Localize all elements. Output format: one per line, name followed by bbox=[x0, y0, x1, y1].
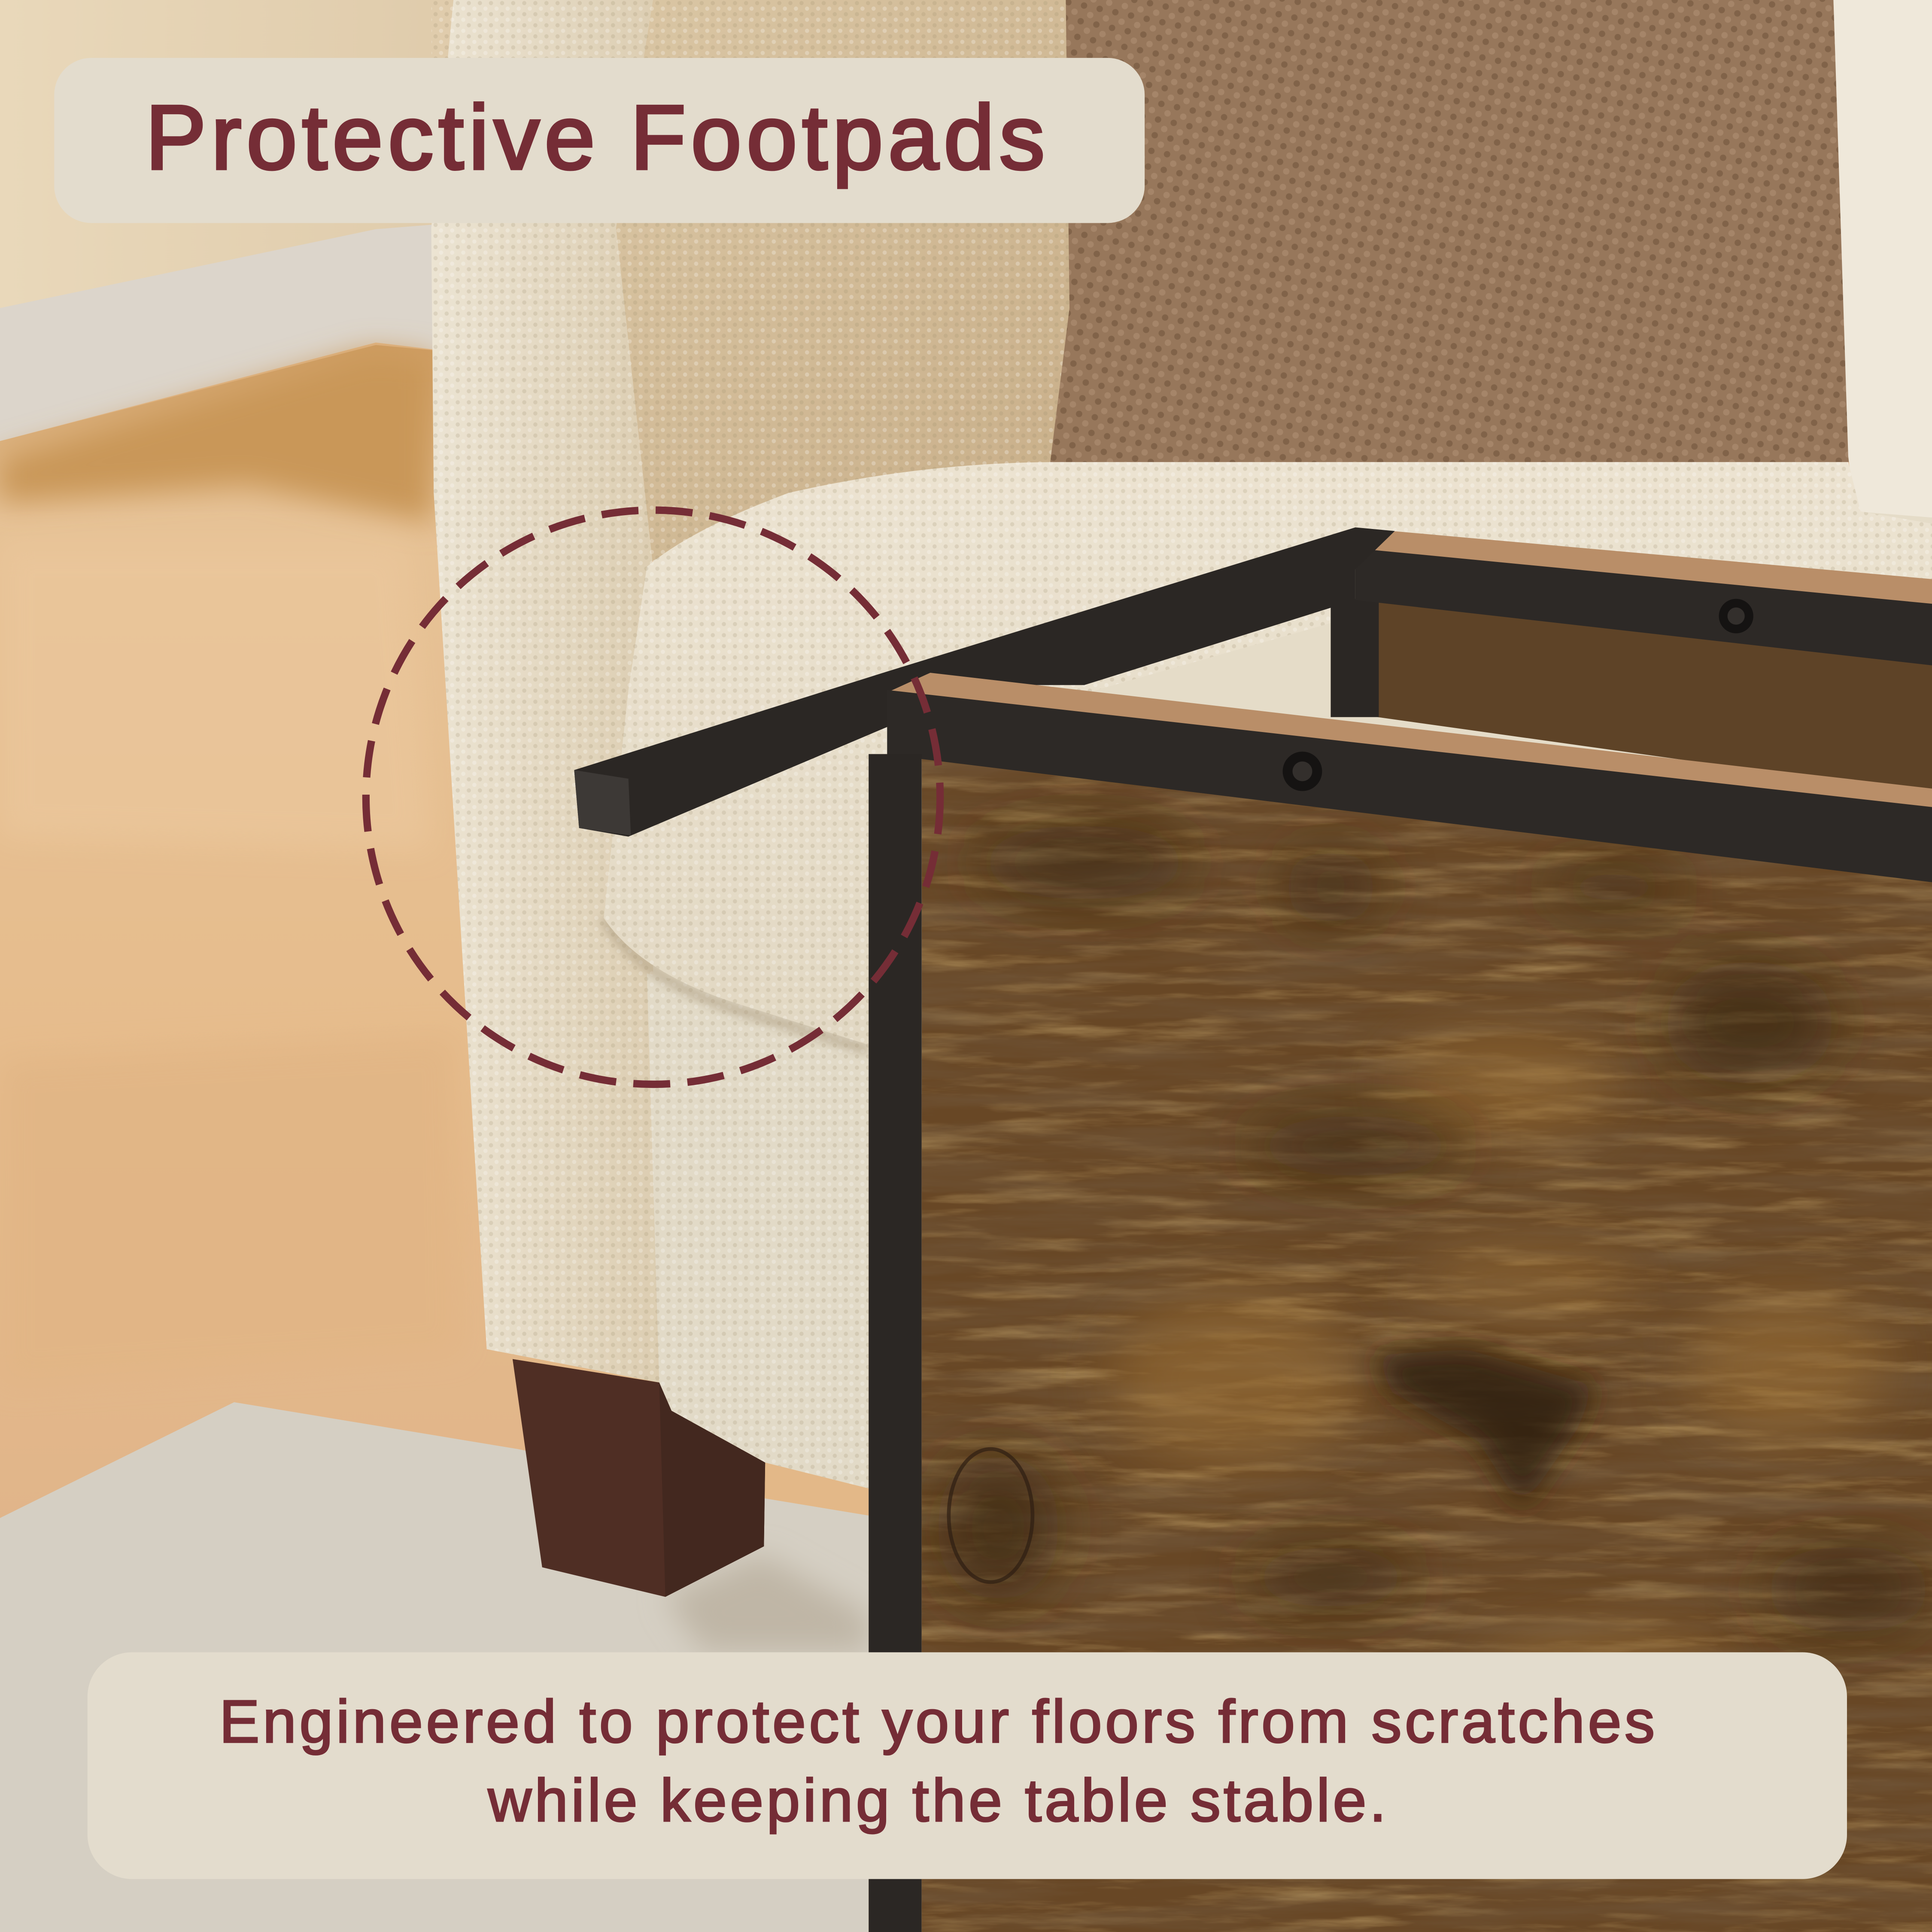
rail screw back bbox=[1719, 599, 1753, 633]
wood knot bbox=[949, 1449, 1033, 1582]
front frame rail bbox=[887, 690, 1932, 882]
title: Protective Footpads bbox=[146, 87, 1045, 188]
front wood top strip bbox=[887, 673, 1932, 811]
front frame leg bbox=[869, 754, 922, 1932]
rail screw front bbox=[1283, 752, 1322, 791]
seat weave bbox=[604, 462, 1932, 1045]
lower seat weave bbox=[647, 973, 869, 1488]
cushion shadow bbox=[604, 918, 869, 1050]
side rail bar bbox=[574, 527, 1395, 837]
back frame rail bbox=[1355, 548, 1932, 665]
back wood panel bbox=[1378, 592, 1932, 795]
lower seat front bbox=[647, 973, 869, 1488]
sofa body base bbox=[653, 493, 1932, 1109]
brown pillow bbox=[1050, 0, 1854, 466]
caption panel bbox=[88, 1653, 1847, 1879]
side table bbox=[574, 527, 1932, 1932]
rug shadow under leg bbox=[665, 1555, 869, 1651]
sofa arm weave bbox=[431, 0, 1072, 1382]
background: baseboard bbox=[0, 224, 437, 441]
front wood panel bbox=[922, 739, 1932, 1932]
seat cushion bbox=[604, 462, 1932, 1045]
background: wall bbox=[0, 0, 468, 339]
dark wood burn bbox=[1374, 1349, 1596, 1510]
sofa arm inner panel bbox=[616, 0, 1072, 579]
pillow weave bbox=[1050, 0, 1854, 466]
back wood top strip bbox=[1355, 531, 1932, 606]
wood highlights bbox=[1109, 1035, 1885, 1719]
sofa bbox=[431, 0, 1932, 1597]
wood grain bbox=[922, 739, 1932, 1932]
background: wooden floor bbox=[0, 345, 875, 1651]
wood light grain bbox=[922, 739, 1932, 1932]
title panel bbox=[54, 58, 1145, 223]
dashed highlight circle bbox=[366, 510, 940, 1084]
wood blotches bbox=[936, 826, 1932, 1633]
white cushion bbox=[1833, 0, 1932, 517]
back frame leg bbox=[1331, 599, 1379, 717]
sofa arm outer panel bbox=[431, 0, 659, 1382]
caption line 1: Engineered to protect your floors from scratches bbox=[219, 1688, 1655, 1755]
bar end cap bbox=[574, 770, 631, 835]
caption line 2: while keeping the table stable. bbox=[487, 1767, 1386, 1834]
background: rug bbox=[0, 1402, 869, 1932]
wooden sofa leg bbox=[513, 1359, 765, 1597]
